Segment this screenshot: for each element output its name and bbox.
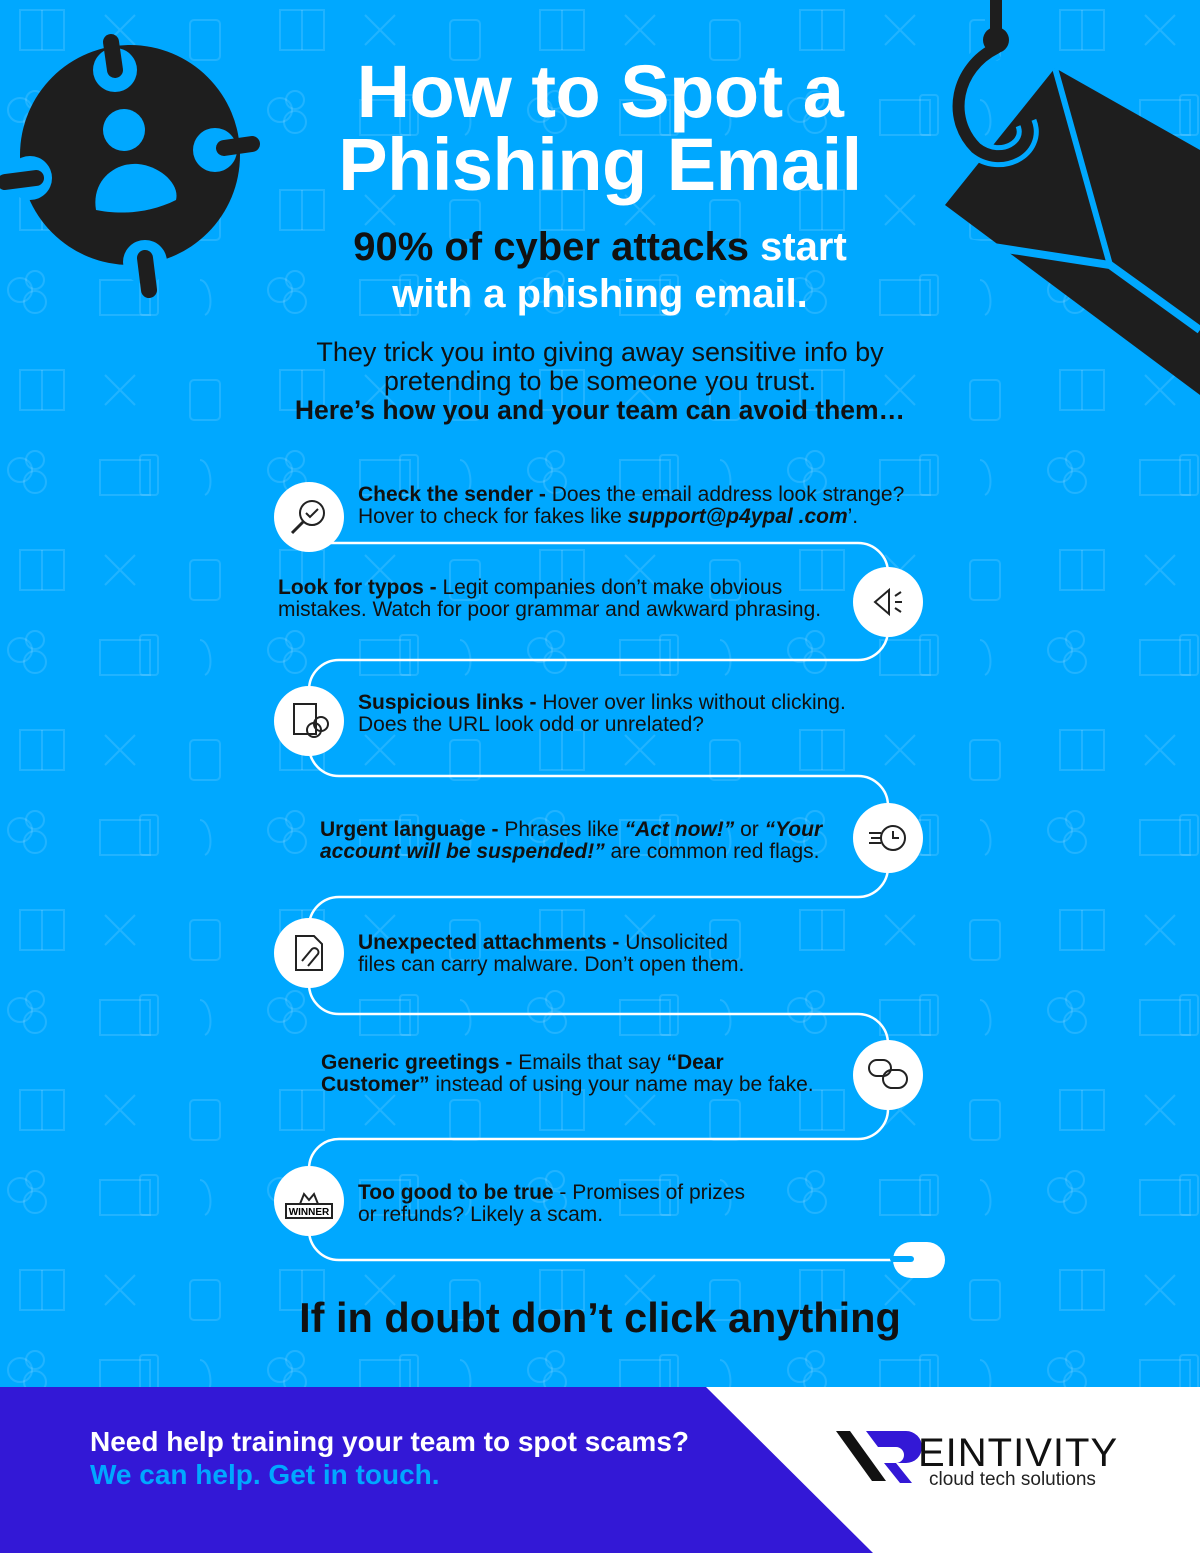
icon: chat	[853, 1040, 923, 1110]
call to action: Need help training your team to spot scams?	[90, 1426, 689, 1457]
footer purple panel	[0, 1387, 873, 1553]
icon: attachment	[274, 918, 344, 988]
step 1	[274, 482, 904, 552]
text: Suspicious links - Hover over links without clicking.	[358, 691, 846, 714]
text	[358, 691, 846, 736]
title: Phishing Email	[338, 123, 862, 206]
subtitle	[353, 225, 847, 316]
icon: clock	[853, 803, 923, 873]
logo: cloud tech solutions	[929, 1469, 1096, 1490]
closing heading: If in doubt don’t click anything	[299, 1294, 901, 1341]
footer	[0, 1387, 1200, 1553]
logo	[836, 1431, 1118, 1490]
step 2: mistakes. Watch for poor grammar and awkward phrasing.	[278, 598, 821, 621]
icon: winner: WINNER	[289, 1207, 330, 1218]
text: Hover to check for fakes like support@p4ypal .com’.	[358, 505, 858, 528]
step 5	[274, 918, 744, 988]
step 7	[274, 1166, 745, 1236]
text: files can carry malware. Don’t open them.	[358, 953, 744, 976]
icon: document link	[274, 686, 344, 756]
text: Check the sender - Does the email address look strange?	[358, 483, 904, 506]
call to action	[90, 1426, 689, 1490]
icon: winner	[274, 1166, 344, 1236]
step 6	[321, 1040, 923, 1110]
step 4	[320, 803, 923, 873]
text: Unexpected attachments - Unsolicited	[358, 931, 728, 954]
icon: target person	[0, 34, 260, 298]
icon: hooked envelope	[945, 0, 1200, 395]
step 2	[278, 567, 923, 637]
icon: magnifier	[274, 482, 344, 552]
intro text	[295, 337, 905, 425]
text: Too good to be true - Promises of prizes	[358, 1181, 745, 1204]
text	[358, 1181, 745, 1226]
intro text: Here’s how you and your team can avoid them…	[295, 395, 905, 425]
text: Does the URL look odd or unrelated?	[358, 713, 704, 736]
text: or refunds? Likely a scam.	[358, 1203, 603, 1226]
intro text: They trick you into giving away sensitive info by	[316, 337, 884, 367]
text	[358, 483, 904, 528]
step 3	[274, 686, 846, 756]
subtitle: 90% of cyber attacks start	[353, 225, 847, 269]
icon: mouse end	[890, 1242, 945, 1278]
icon: megaphone	[853, 567, 923, 637]
step 6: Generic greetings - Emails that say “Dear	[321, 1051, 724, 1074]
step 6: Customer” instead of using your name may be fake.	[321, 1073, 814, 1096]
step 4: Urgent language - Phrases like “Act now!” or “Your	[320, 818, 822, 841]
intro text: pretending to be someone you trust.	[384, 366, 816, 396]
step 2: Look for typos - Legit companies don’t make obvious	[278, 576, 782, 599]
call to action: We can help. Get in touch.	[90, 1459, 440, 1490]
step 4: account will be suspended!” are common red flags.	[320, 840, 819, 863]
title: How to Spot a	[357, 50, 843, 133]
subtitle: with a phishing email.	[392, 272, 808, 316]
title	[338, 50, 862, 206]
text	[358, 931, 744, 976]
logo: EINTIVITY	[918, 1431, 1118, 1475]
